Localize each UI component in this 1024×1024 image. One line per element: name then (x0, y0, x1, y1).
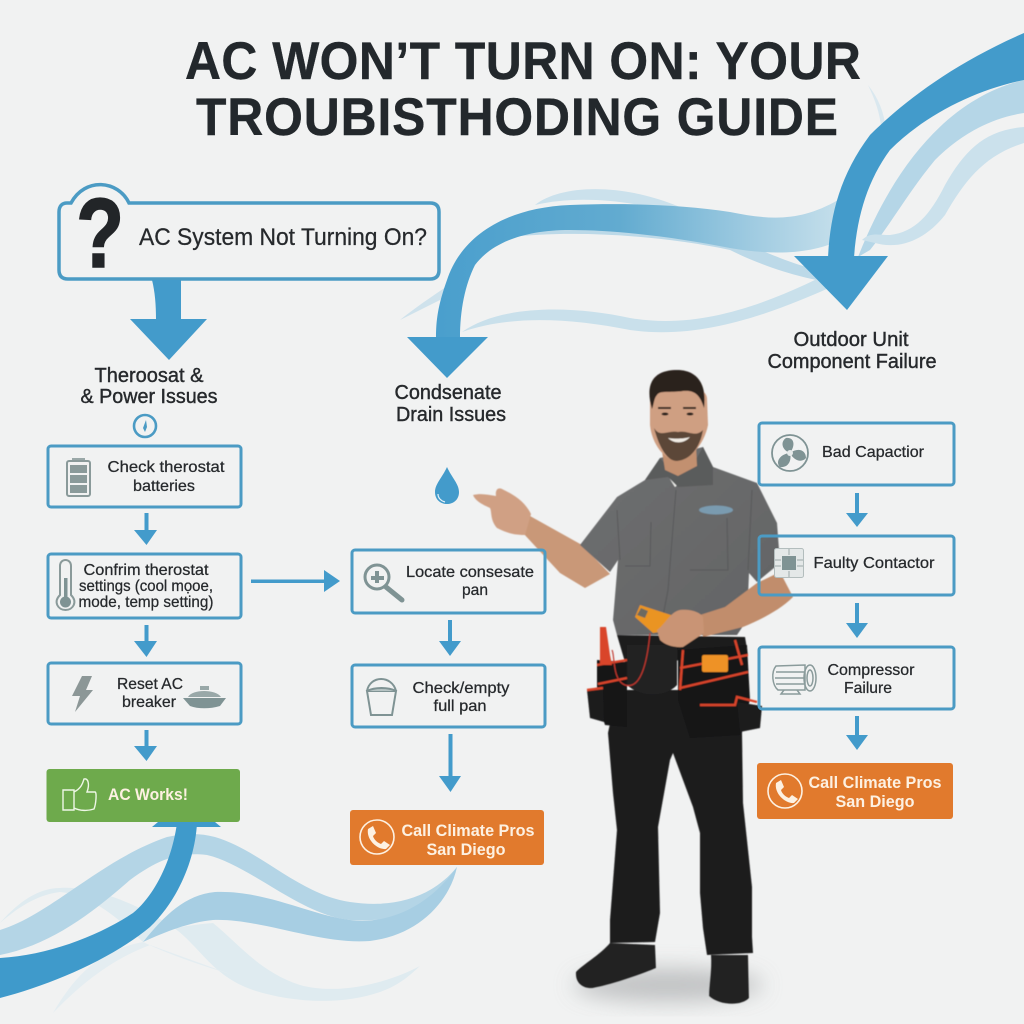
shirt logo (699, 506, 733, 514)
step: reset AC breaker (48, 663, 241, 724)
step: faulty contactor (759, 536, 954, 595)
tool pouch centre (627, 645, 677, 694)
icon: small power circle (134, 415, 156, 437)
callout: call climate pros, right: San Diego (836, 792, 914, 811)
right arm (700, 572, 793, 637)
holding hand (657, 610, 704, 647)
arrow: start to thermostat (130, 280, 207, 360)
step: locate condensate pan: Locate consesate (406, 564, 534, 581)
icon: question mark: ? (76, 179, 124, 288)
title: TROUBISTHODING GUIDE (196, 87, 838, 146)
step: check or empty pan: full pan (434, 698, 486, 715)
tool pouch right (678, 645, 750, 738)
floor shadow (573, 968, 763, 1002)
belt (617, 635, 748, 662)
step: locate condensate pan: pan (462, 582, 488, 599)
heading: thermostat and power: Theroosat & (94, 365, 204, 387)
multimeter (635, 605, 677, 633)
arrow: compressor to call (846, 716, 868, 750)
collar (645, 447, 713, 487)
left arm (523, 516, 610, 588)
left shoe (576, 943, 656, 988)
step: bad capacitor (759, 423, 954, 485)
heading: thermostat and power: & Power Issues (80, 386, 218, 408)
arrow: locate to check (439, 620, 461, 656)
smile (668, 437, 690, 442)
heading: condensate drain issues (394, 382, 506, 426)
title (185, 31, 861, 146)
callout: call climate pros, middle (350, 810, 544, 865)
decorative ribbons: top right (858, 80, 1024, 257)
eyes (658, 407, 696, 416)
step: check thermostat batteries: batteries (133, 478, 195, 495)
step: reset AC breaker: breaker (122, 694, 177, 711)
arrow: curved bottom-left up into AC Works (0, 822, 221, 998)
icon: bucket (367, 679, 396, 715)
outcome: AC works: AC Works! (108, 785, 188, 804)
step: bad capacitor: Bad Capactior (822, 444, 925, 461)
shirt (580, 447, 780, 635)
red pouch trim (587, 640, 757, 705)
icon: battery (67, 458, 90, 496)
heading: outdoor unit failure: Component Failure (768, 351, 936, 373)
step: check thermostat batteries: Check therostat (108, 459, 225, 476)
icon: chip (774, 548, 804, 578)
heading: outdoor unit failure: Outdoor Unit (794, 329, 909, 351)
step: check or empty pan: Check/empty (412, 680, 510, 697)
icon: fan (772, 435, 808, 471)
icon: magnifier (365, 565, 402, 600)
callout: call climate pros, right (757, 763, 953, 819)
step: compressor failure: Compressor (828, 662, 915, 679)
right shoe (709, 955, 749, 1004)
arrow: check to call (439, 734, 461, 792)
step: reset AC breaker: Reset AC (117, 676, 183, 693)
heading: condensate drain issues: Condsenate (394, 382, 502, 404)
step: check thermostat batteries (48, 446, 241, 507)
panel: start question: AC System Not Turning On? (139, 224, 427, 251)
icon: thermometer (57, 560, 74, 610)
meter lead wire (612, 633, 650, 686)
icon: phone (360, 820, 394, 854)
step: confirm thermostat settings: settings (cool mọoe, (79, 578, 213, 595)
arrow: capacitor to contactor (846, 493, 868, 527)
step: compressor failure (759, 647, 954, 709)
neck (661, 445, 697, 476)
decorative ribbons: bottom (0, 834, 457, 1013)
callout: call climate pros, right: Call Climate Pros (808, 773, 942, 792)
arrow: contactor to compressor (846, 603, 868, 638)
callout: call climate pros, middle: San Diego (426, 840, 506, 859)
decorative ribbons: top middle (400, 189, 850, 332)
title: AC WON’T TURN ON: YOUR (185, 31, 861, 90)
shirt folds and pocket (617, 490, 752, 632)
icon: thumbs up (63, 779, 96, 810)
step: locate condensate pan (352, 550, 545, 613)
pointing hand (473, 488, 531, 535)
pants (608, 690, 753, 955)
undershirt (668, 476, 688, 487)
heading: outdoor unit failure (768, 329, 936, 373)
panel: start question (59, 179, 439, 288)
tool pouch far left (587, 686, 604, 722)
icon: motor (773, 665, 816, 694)
arrow: horizontal to condensate pan (251, 570, 340, 592)
step: faulty contactor: Faulty Contactor (814, 555, 935, 572)
arrow: step 3 to AC works (134, 730, 157, 761)
tool pouch far right (737, 702, 762, 732)
outcome: AC works (46, 769, 240, 822)
step: confirm thermostat settings: mode, temp setting) (78, 594, 214, 611)
icon: water drop (435, 467, 459, 504)
icon: phone (768, 774, 802, 808)
step: confirm thermostat settings (48, 554, 241, 618)
step: compressor failure: Failure (844, 680, 892, 697)
arrow: step 2 to step 3 (134, 625, 157, 657)
beard (654, 428, 703, 461)
icon: lightning bolt (72, 676, 93, 712)
heading: thermostat and power (80, 365, 218, 408)
tool pouch left (597, 660, 627, 727)
arrow: curved to condensate drain issues (407, 200, 840, 378)
face (650, 384, 708, 461)
red tool (600, 627, 612, 665)
step: confirm thermostat settings: Confrim therostat (84, 562, 209, 579)
orange pouch block (702, 655, 728, 672)
arrow: curved from right edge to outdoor unit (794, 33, 1024, 310)
icon: pot (183, 686, 226, 708)
callout: call climate pros, middle: Call Climate Pros (402, 821, 534, 840)
step: check or empty pan (352, 665, 545, 727)
arrow: step 1 to step 2 (134, 513, 157, 545)
hair (649, 370, 705, 409)
heading: condensate drain issues: Drain Issues (396, 404, 506, 426)
technician (473, 370, 793, 1004)
